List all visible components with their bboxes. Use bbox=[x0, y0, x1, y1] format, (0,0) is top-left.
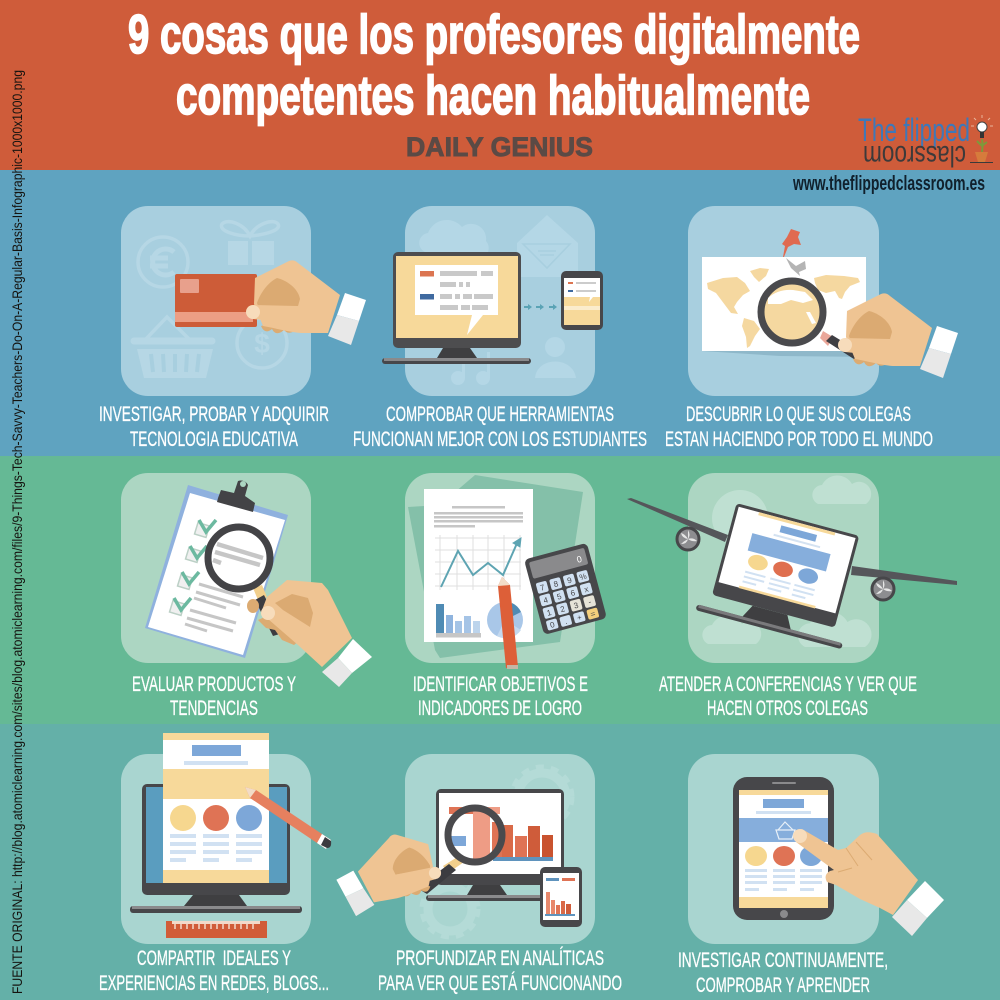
icon: hand holding card bbox=[246, 260, 366, 345]
icon: calculator: 6 bbox=[570, 588, 577, 598]
panel 4: evaluar productos bbox=[121, 473, 372, 687]
icon: calculator: 7 bbox=[539, 583, 546, 593]
icon: magnifier bbox=[417, 808, 502, 894]
bar chart bbox=[436, 604, 481, 638]
caption 1: INVESTIGAR, PROBAR Y ADQUIRIR bbox=[99, 403, 329, 426]
panel 5: identificar objetivos bbox=[405, 473, 607, 669]
caption 1 bbox=[99, 403, 329, 451]
panel: header band bbox=[0, 0, 1000, 170]
icon: calculator: + bbox=[576, 613, 583, 623]
icon: calculator: % bbox=[578, 572, 588, 582]
icon: calculator: 9 bbox=[566, 575, 573, 585]
icon: magnifier bbox=[208, 527, 283, 636]
caption 9: COMPROBAR Y APRENDER bbox=[696, 974, 870, 997]
icon: desktop monitor with chat bbox=[382, 252, 531, 364]
icons: faded shopping symbols: $ bbox=[254, 328, 270, 359]
caption 5: INDICADORES DE LOGRO bbox=[418, 697, 582, 720]
icon: hand with magnifier bbox=[247, 580, 372, 687]
panel 7: compartir ideales bbox=[121, 733, 331, 944]
icon: ruler bbox=[166, 921, 267, 938]
title bbox=[128, 3, 860, 126]
caption 2 bbox=[353, 403, 647, 451]
caption 5 bbox=[413, 673, 588, 720]
panel: green row band bbox=[0, 456, 1000, 724]
line chart bbox=[435, 535, 521, 590]
icon: monitor with page bbox=[130, 733, 302, 913]
icon: tablet bbox=[733, 777, 834, 920]
panel 6: atender a conferencias bbox=[627, 473, 957, 663]
icon: pencil bbox=[245, 787, 331, 849]
tile background 9 bbox=[688, 754, 879, 944]
panel 8: profundizar en analíticas bbox=[330, 754, 595, 944]
tile background 5 bbox=[405, 473, 595, 663]
caption 3 bbox=[665, 403, 933, 451]
icon: monitor with bar chart bbox=[426, 789, 564, 901]
icon: calculator: - bbox=[587, 597, 592, 607]
icon: calculator: 0 bbox=[549, 620, 556, 630]
icon: calculator: . bbox=[564, 617, 568, 626]
icon: calculator: 1 bbox=[546, 608, 553, 618]
icon: wings and engines bbox=[627, 498, 957, 600]
icon: pointing hand bbox=[793, 829, 944, 936]
icon: smartphone bbox=[561, 271, 603, 330]
icon: calculator: x bbox=[583, 585, 589, 594]
tile background 4 bbox=[121, 473, 311, 663]
tile background 3 bbox=[688, 206, 879, 396]
icon: magnifier on map bbox=[761, 281, 868, 363]
tile background 6 bbox=[688, 473, 879, 663]
panel 3: descubrir colegas bbox=[688, 206, 958, 396]
icons: faded cloud, mail, music, person bbox=[419, 215, 578, 385]
icons: faded clouds bbox=[702, 475, 872, 647]
icon: calculator: 0 bbox=[576, 554, 583, 565]
panel: teal row band bbox=[0, 724, 1000, 1000]
caption 7 bbox=[99, 947, 329, 995]
icon: calculator: 3 bbox=[573, 601, 580, 611]
icon: red pin bbox=[782, 229, 801, 257]
icons: faded gears bbox=[422, 767, 572, 937]
icon: background sheets bbox=[408, 475, 583, 658]
caption 8 bbox=[378, 947, 622, 995]
icon: hand with magnifier bbox=[330, 828, 446, 918]
panel 2: comprobar herramientas bbox=[382, 206, 603, 396]
icon: calculator: = bbox=[590, 609, 597, 619]
caption 9: INVESTIGAR CONTINUAMENTE, bbox=[678, 949, 888, 972]
logo: The flipped classroom: classroom bbox=[863, 139, 966, 172]
icon: calculator: 5 bbox=[556, 592, 563, 602]
caption 6 bbox=[659, 673, 917, 720]
icon: calculator bbox=[524, 543, 607, 635]
caption 7: EXPERIENCIAS EN REDES, BLOGS... bbox=[99, 972, 329, 995]
icon: red pencil bbox=[498, 577, 518, 669]
caption 4: TENDENCIAS bbox=[170, 697, 258, 720]
brand: Daily Genius: DAILY GENIUS bbox=[406, 132, 593, 162]
caption 8: PARA VER QUE ESTÁ FUNCIONANDO bbox=[378, 972, 622, 995]
icon: calculator: 4 bbox=[542, 595, 550, 605]
tile background 7 bbox=[121, 754, 311, 944]
caption 2: COMPROBAR QUE HERRAMIENTAS bbox=[386, 403, 614, 426]
logo: The flipped classroom bbox=[858, 112, 993, 172]
caption 9 bbox=[678, 949, 888, 997]
caption 1: TECNOLOGIA EDUCATIVA bbox=[130, 428, 298, 451]
pie chart bbox=[487, 602, 523, 638]
icon: hand with magnifier bbox=[838, 293, 958, 378]
caption 6: HACEN OTROS COLEGAS bbox=[707, 697, 868, 720]
icon: world map bbox=[702, 229, 872, 357]
tile background 2 bbox=[405, 206, 595, 396]
panel: blue row band bbox=[0, 170, 1000, 456]
caption 2: FUNCIONAN MEJOR CON LOS ESTUDIANTES bbox=[353, 428, 647, 451]
caption 7: COMPARTIR IDEALES Y bbox=[137, 947, 291, 970]
icons: faded shopping symbols bbox=[134, 222, 287, 378]
caption 5: IDENTIFICAR OBJETIVOS E bbox=[413, 673, 588, 696]
panel 1: investigar, probar y adquirir bbox=[121, 206, 366, 396]
caption 4 bbox=[132, 673, 296, 720]
caption 4: EVALUAR PRODUCTOS Y bbox=[132, 673, 296, 696]
icon: credit card bbox=[175, 274, 257, 327]
caption 8: PROFUNDIZAR EN ANALÍTICAS bbox=[396, 947, 604, 970]
icon: calculator: 8 bbox=[553, 579, 560, 589]
icon: clipboard checklist bbox=[145, 480, 288, 658]
icon: tablet with chart bbox=[540, 867, 582, 927]
panel 9: investigar continuamente bbox=[688, 754, 944, 944]
icon: tilted monitor bbox=[696, 500, 871, 649]
tile background 1 bbox=[121, 206, 311, 396]
tile background 8 bbox=[405, 754, 595, 944]
arrows: monitor to phone bbox=[524, 304, 557, 310]
icon: report sheet bbox=[424, 489, 533, 642]
icon: calculator: 2 bbox=[559, 604, 567, 614]
